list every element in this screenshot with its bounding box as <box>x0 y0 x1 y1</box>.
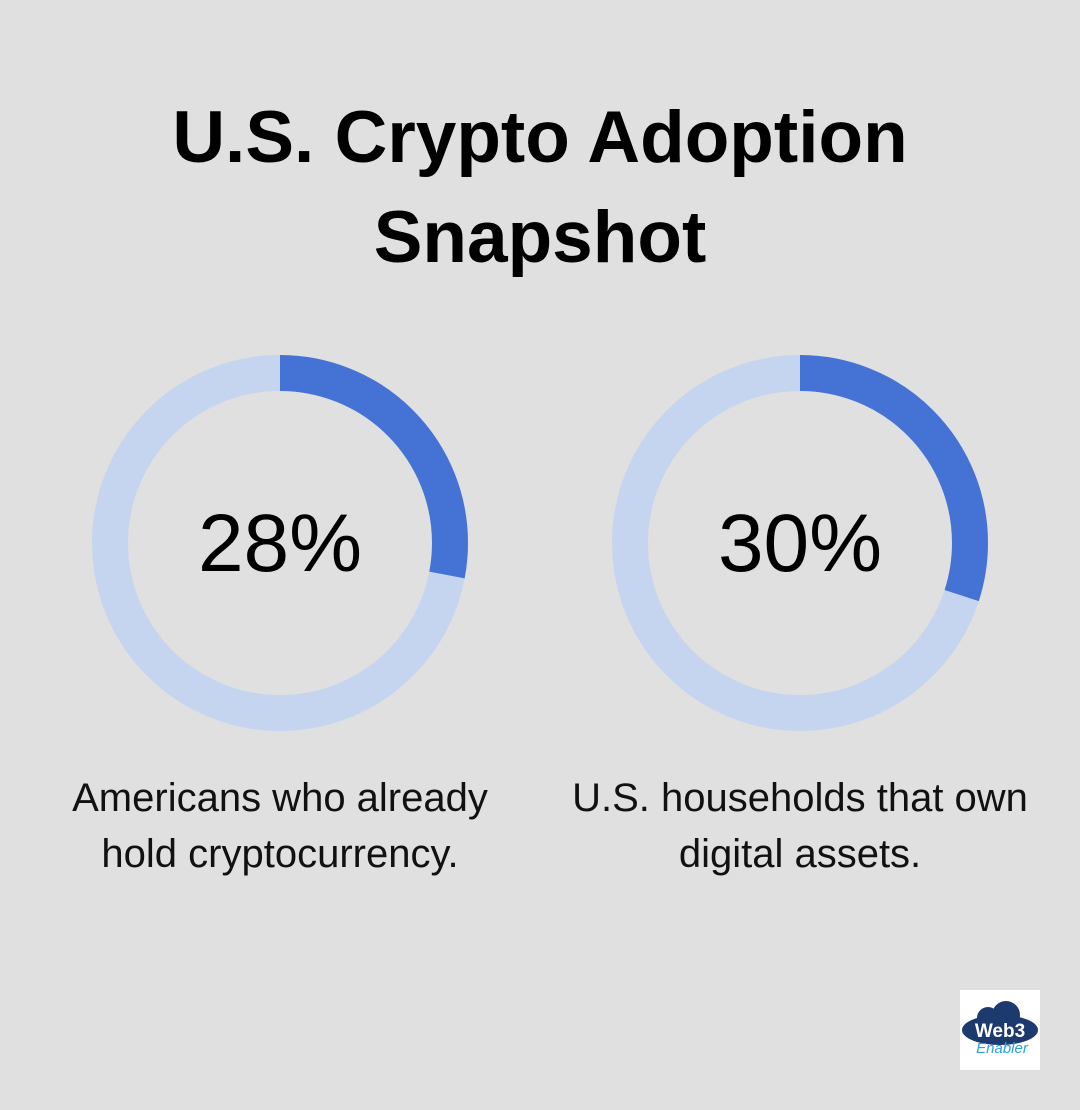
caption right: digital assets. <box>679 832 921 876</box>
caption left: hold cryptocurrency. <box>101 832 459 876</box>
donut chart: 28%: 28% <box>198 498 362 589</box>
title: Snapshot <box>374 197 706 278</box>
donut chart: 30% <box>612 355 988 731</box>
title: U.S. Crypto Adoption <box>172 97 908 178</box>
caption right <box>572 776 1028 876</box>
title <box>172 97 908 278</box>
logo: Enabler <box>976 1040 1029 1057</box>
caption left: Americans who already <box>72 776 488 820</box>
logo: Web3 <box>975 1021 1025 1042</box>
logo <box>960 990 1040 1070</box>
caption left <box>72 776 488 876</box>
donut chart: 30%: 30% <box>718 498 882 589</box>
caption right: U.S. households that own <box>572 776 1028 820</box>
donut chart: 28% <box>92 355 468 731</box>
